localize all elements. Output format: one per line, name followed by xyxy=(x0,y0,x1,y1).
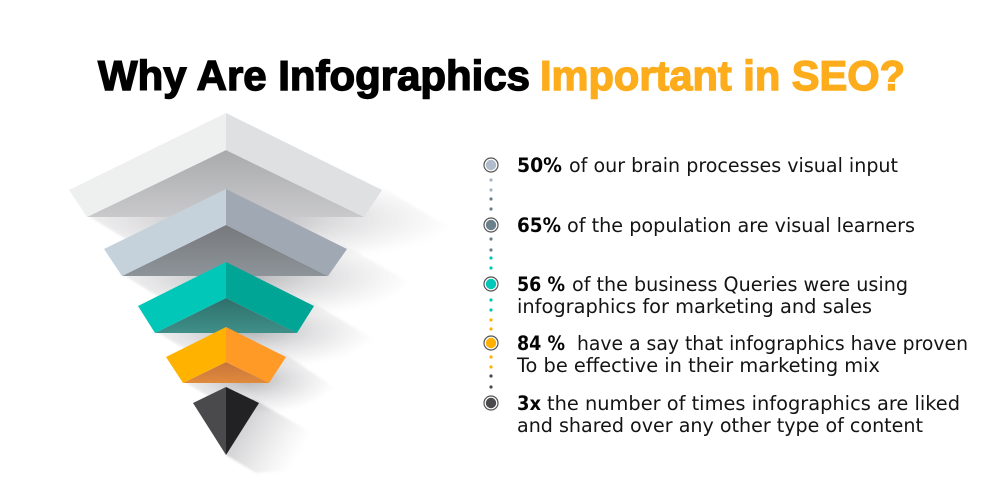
text 5: and shared over any other type of content xyxy=(517,414,923,437)
text 3: 56 % xyxy=(517,273,565,296)
tier 5: dark tip xyxy=(193,387,259,455)
text 2: 65% xyxy=(517,214,561,237)
item 2 xyxy=(484,214,915,237)
tier 4: orange xyxy=(166,327,286,383)
text 1: 50% xyxy=(517,154,562,177)
tier 2: blue grey xyxy=(104,189,347,276)
text 3: infographics for marketing and sales xyxy=(517,295,872,318)
title xyxy=(98,52,905,99)
marker 3 xyxy=(484,277,498,291)
marker 4 xyxy=(484,336,498,350)
timeline connector dots xyxy=(489,178,493,389)
marker 1 xyxy=(484,158,498,172)
text 4: To be effective in their marketing mix xyxy=(516,354,880,377)
text 2: of the population are visual learners xyxy=(567,214,915,237)
text 3 xyxy=(517,273,908,318)
marker 5 xyxy=(484,396,498,410)
title: Why Are Infographics xyxy=(98,52,530,99)
tier 3: teal xyxy=(138,262,314,333)
tier 1: light grey xyxy=(69,113,382,217)
text 4: 84 % xyxy=(517,332,565,355)
item 5 xyxy=(484,392,960,437)
text 4: have a say that infographics have proven xyxy=(577,332,968,355)
text 5 xyxy=(517,392,960,437)
text 5: 3x xyxy=(517,392,541,415)
funnel graphic xyxy=(69,113,450,473)
item 3 xyxy=(484,273,908,318)
text 4 xyxy=(516,332,968,377)
text 3: of the business Queries were using xyxy=(572,273,908,296)
title: Important in SEO? xyxy=(540,52,905,99)
item 4 xyxy=(484,332,968,377)
text 1: of our brain processes visual input xyxy=(569,154,898,177)
marker 2 xyxy=(484,218,498,232)
item 1 xyxy=(484,154,898,177)
cast shadows xyxy=(90,185,450,473)
text 5: the number of times infographics are liked xyxy=(547,392,960,415)
